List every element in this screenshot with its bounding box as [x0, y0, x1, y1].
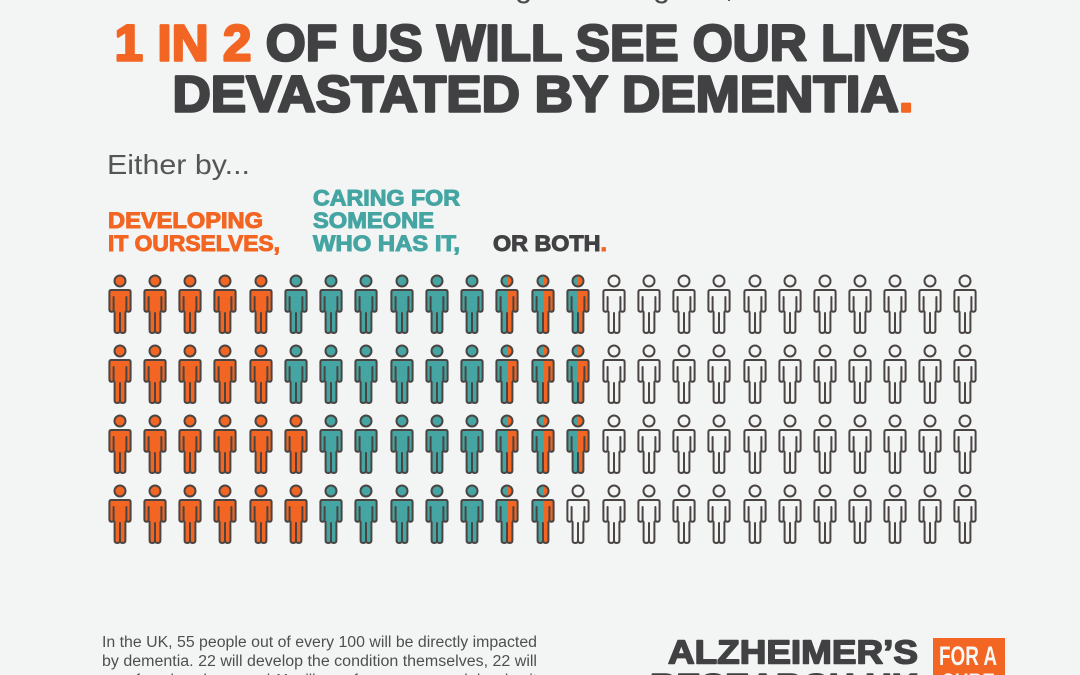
intro: Either by: Either by... — [107, 149, 250, 180]
logo badge: for a cure — [933, 638, 1005, 675]
logo badge: for a cure: FOR A — [939, 641, 997, 671]
label: developing it ourselves — [108, 208, 280, 256]
title — [114, 14, 970, 122]
people row 2 — [109, 346, 976, 403]
label: developing it ourselves: IT OURSELVES, — [108, 231, 280, 256]
logo line 1: ALZHEIMER’S — [668, 634, 918, 670]
label: caring for someone who has it: WHO HAS IT, — [313, 231, 460, 256]
logo: Alzheimer's Research UK — [650, 634, 918, 675]
pictogram chart: 100 people — [109, 276, 976, 543]
body text — [102, 634, 538, 675]
label: developing it ourselves: DEVELOPING — [108, 208, 263, 233]
label: caring for someone who has it: CARING FOR — [313, 186, 460, 210]
label: caring for someone who has it — [313, 186, 460, 256]
label: caring for someone who has it: SOMEONE — [313, 208, 434, 233]
body text: In the UK, 55 people out of every 100 will be directly impacted — [102, 634, 537, 651]
people row 1 — [109, 276, 976, 333]
body text: by dementia. 22 will develop the condition themselves, 22 will — [102, 653, 537, 670]
title line 1: 1 IN 2 OF US WILL SEE OUR LIVES — [114, 14, 970, 72]
title line 2: DEVASTATED BY DEMENTIA . — [172, 66, 913, 122]
label: or both: OR BOTH . — [493, 231, 607, 256]
people row 4 — [109, 486, 976, 543]
people row 3 — [109, 416, 976, 473]
